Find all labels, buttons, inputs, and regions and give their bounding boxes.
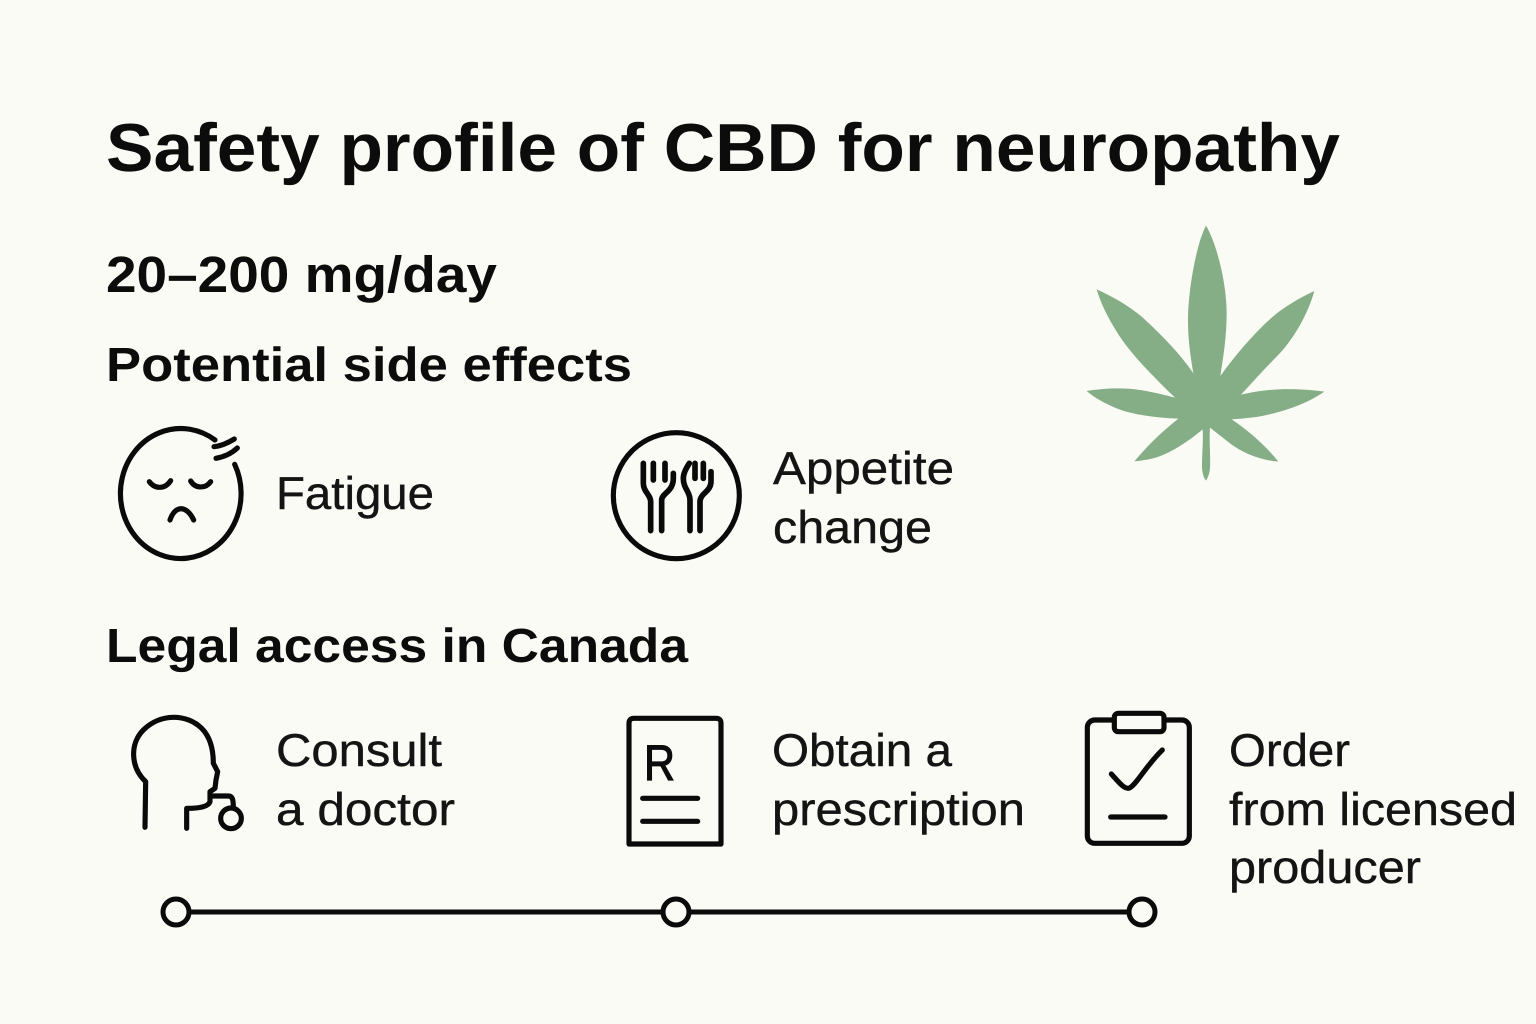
label: order from licensed producer: producer <box>1229 841 1421 893</box>
heading: legal access in Canada: Legal access in Canada <box>106 620 688 673</box>
icon: prescription sheet: R <box>644 735 675 791</box>
label: consult a doctor: a doctor <box>276 783 455 835</box>
icon: clipboard with check <box>1087 713 1189 843</box>
heading: potential side effects: Potential side effects <box>106 339 632 392</box>
title: Safety profile of CBD for neuropathy <box>106 110 1340 186</box>
label: appetite change: change <box>773 501 932 553</box>
icon: forks in circle <box>613 433 739 559</box>
label: appetite change: Appetite <box>773 442 954 494</box>
icon: prescription sheet <box>629 718 721 844</box>
label: order from licensed producer: Order <box>1229 724 1350 776</box>
label: consult a doctor <box>276 724 455 835</box>
label: order from licensed producer <box>1229 724 1517 893</box>
label: obtain a prescription: Obtain a <box>772 724 952 776</box>
label: fatigue: Fatigue <box>276 467 434 519</box>
label: appetite change <box>773 442 954 553</box>
icon: tired face <box>120 429 241 559</box>
label: obtain a prescription: prescription <box>772 783 1025 835</box>
timeline with three steps <box>163 899 1155 925</box>
icon: doctor head with stethoscope <box>134 717 241 829</box>
dosage heading: 20–200 mg/day <box>106 246 498 303</box>
label: consult a doctor: Consult <box>276 724 442 776</box>
label: obtain a prescription <box>772 724 1025 835</box>
icon: cannabis leaf <box>1087 226 1324 481</box>
label: order from licensed producer: from licensed <box>1229 783 1517 835</box>
